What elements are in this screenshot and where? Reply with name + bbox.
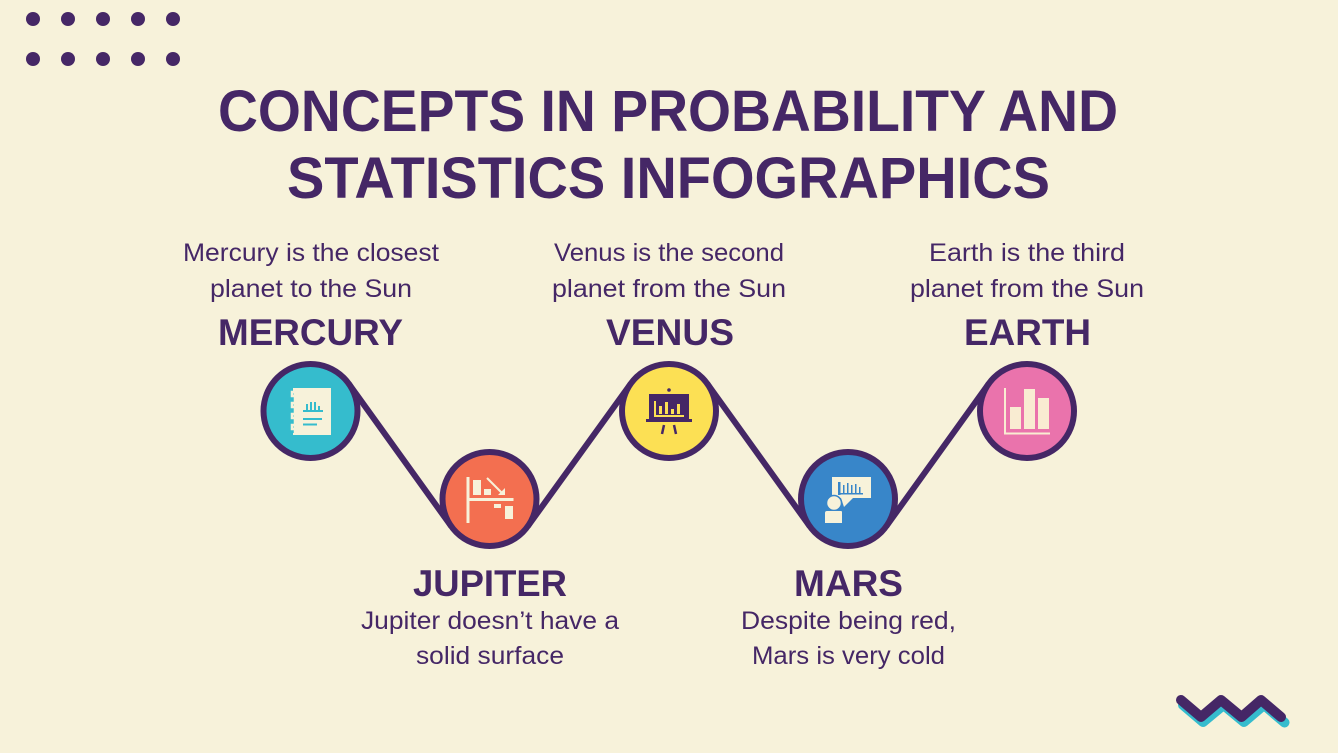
- earth text block: planet from the Sun: [910, 275, 1144, 303]
- decorative dot grid: [26, 12, 180, 66]
- title: STATISTICS INFOGRAPHICS: [287, 146, 1050, 211]
- jupiter text block: JUPITER: [413, 563, 567, 604]
- venus text block: [552, 239, 786, 353]
- mars text block: [741, 563, 956, 670]
- earth text block: [910, 239, 1144, 353]
- jupiter text block: Jupiter doesn’t have a: [361, 607, 619, 635]
- mercury text block: [183, 239, 439, 353]
- jupiter node: descending chart icon: [442, 452, 536, 546]
- zigzag connector line: [349, 384, 989, 526]
- mercury node: notebook icon: [264, 364, 358, 458]
- mars text block: MARS: [794, 563, 903, 604]
- title: CONCEPTS IN PROBABILITY AND: [218, 79, 1118, 144]
- venus text block: Venus is the second: [554, 239, 784, 267]
- earth node: bar chart icon: [980, 364, 1074, 458]
- mars node: speaker with chart icon: [801, 452, 895, 546]
- mars text block: Despite being red,: [741, 607, 956, 635]
- brand logo zigzag: [1181, 700, 1284, 722]
- mercury text block: planet to the Sun: [210, 275, 412, 303]
- title: [218, 79, 1118, 211]
- venus text block: VENUS: [606, 312, 734, 353]
- venus node: presentation board icon: [622, 364, 716, 458]
- earth text block: EARTH: [964, 312, 1091, 353]
- mercury text block: MERCURY: [218, 312, 403, 353]
- mars text block: Mars is very cold: [752, 642, 945, 670]
- earth text block: Earth is the third: [929, 239, 1125, 267]
- jupiter text block: solid surface: [416, 642, 564, 670]
- jupiter text block: [361, 563, 619, 670]
- venus text block: planet from the Sun: [552, 275, 786, 303]
- mercury text block: Mercury is the closest: [183, 239, 439, 267]
